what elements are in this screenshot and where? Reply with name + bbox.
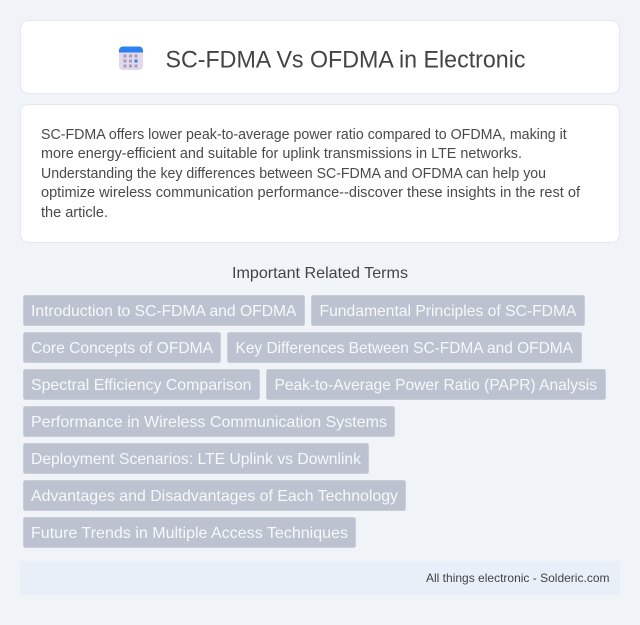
tag: Key Differences Between SC-FDMA and OFDMA [236,340,573,357]
footer: All things electronic - Solderic.com [426,571,610,585]
tag [266,370,606,400]
tag [24,480,406,510]
tag [24,332,220,362]
text block: description [41,127,581,221]
panel: description [20,104,620,242]
icon: calendar [119,46,143,70]
tag [24,444,368,474]
tag: Advantages and Disadvantages of Each Technology [31,488,398,505]
tag [24,296,304,326]
tag: Peak-to-Average Power Ratio (PAPR) Analysis [274,377,597,394]
tag: Future Trends in Multiple Access Techniques [31,525,348,542]
tag [24,406,394,436]
text block: description: more energy-efficient and suitable for uplink transmissions in LTE networks. [41,146,522,162]
footer [20,561,620,595]
tag [228,332,582,362]
tag: Performance in Wireless Communication Systems [31,414,387,431]
text block: description: the article. [41,205,108,221]
tag: Core Concepts of OFDMA [31,340,213,357]
tag [312,296,584,326]
tag: Deployment Scenarios: LTE Uplink vs Downlink [31,451,362,468]
tag: Fundamental Principles of SC-FDMA [320,303,577,320]
panel: header [20,20,620,94]
panel: term tags [24,296,606,548]
heading: related terms: Important Related Terms [232,265,408,282]
tag: Introduction to SC-FDMA and OFDMA [31,303,297,320]
text block: description: optimize wireless communication performance--discover these insights in the rest of [41,185,581,201]
text block: description: Understanding the key differences between SC-FDMA and OFDMA can help you [41,166,546,182]
tag [24,370,260,400]
title: SC-FDMA Vs OFDMA in Electronic [166,46,526,74]
tag: Spectral Efficiency Comparison [31,377,252,394]
text block: description: SC-FDMA offers lower peak-to-average power ratio compared to OFDMA, making it [41,127,567,143]
tag [24,518,356,548]
